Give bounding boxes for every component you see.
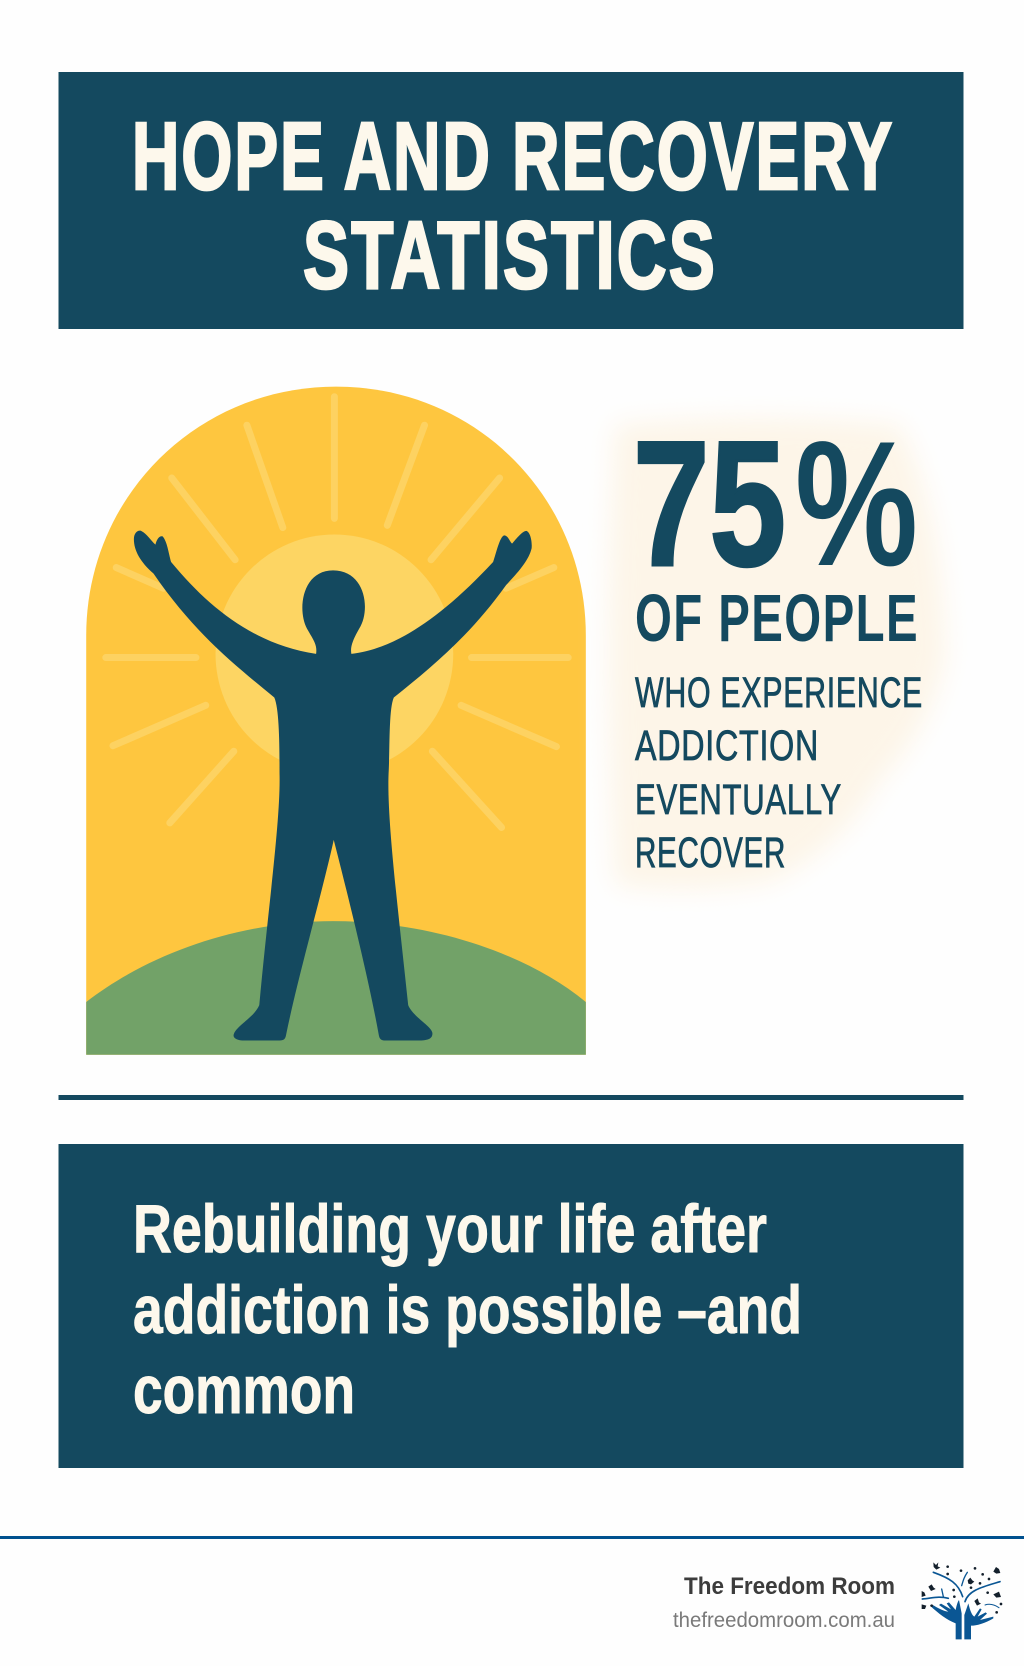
title: STATISTICS [303,202,717,309]
message text [133,1191,802,1428]
icon: tree and hands logo [922,1562,1002,1639]
message text: Rebuilding your life after [133,1191,767,1267]
arch background [86,387,586,1055]
branches [922,1572,1000,1608]
person silhouette [134,531,532,1041]
description: EVENTUALLY [635,776,842,824]
footer brand name: The Freedom Room [684,1573,895,1600]
big number: % [795,404,918,603]
sun disc [216,534,453,773]
sun rays [106,397,568,827]
message text: common [133,1352,355,1428]
description: ADDICTION [635,722,819,770]
big number: 75 [633,404,786,603]
description [635,669,923,877]
title [132,103,894,309]
title banner [58,72,964,329]
message text: addiction is possible –and [133,1272,802,1348]
leaves [922,1562,1002,1614]
green hill [86,921,586,1055]
footer url: thefreedomroom.com.au [673,1609,895,1632]
message banner [58,1144,964,1468]
footer line [0,1536,1024,1539]
statistic: 75 percent recover [609,404,945,889]
hands and trunk [930,1600,993,1639]
description: RECOVER [635,829,786,877]
divider [58,1095,964,1100]
cream glow [609,418,945,889]
illustration: person with raised arms before sun [86,387,586,1055]
